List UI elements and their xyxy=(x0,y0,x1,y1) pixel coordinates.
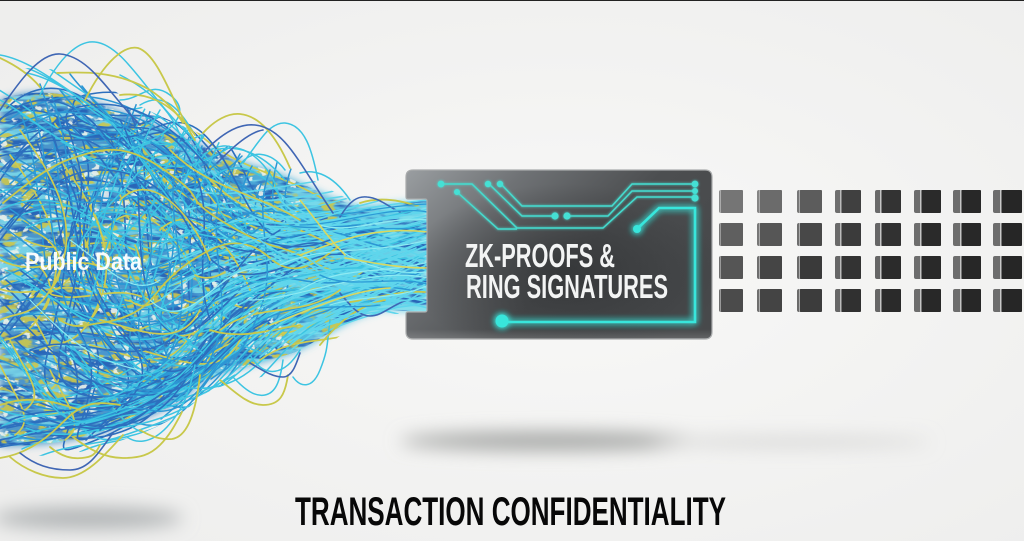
chip upper circuit traces xyxy=(438,181,699,229)
white gaps xyxy=(101,186,253,384)
dark outer arcs xyxy=(0,54,407,470)
block row 2 xyxy=(719,223,1022,246)
pale funnel strands xyxy=(220,200,428,345)
block row 1 xyxy=(719,190,1022,213)
title: TRANSACTION CONFIDENTIALITY xyxy=(295,490,726,534)
yellow strands xyxy=(0,48,425,478)
interior yellow strands xyxy=(0,130,340,410)
cyan strands xyxy=(0,55,420,440)
chip label: RING SIGNATURES xyxy=(466,268,668,305)
outer cyan arcs xyxy=(40,42,350,441)
block row 3 xyxy=(719,256,1022,279)
public data label: Public Data xyxy=(25,248,143,276)
block row 4 xyxy=(719,289,1022,312)
chip lower circuit trace xyxy=(496,208,695,328)
shadow under chip xyxy=(400,432,930,450)
processor chip xyxy=(406,170,712,339)
shadow under tangle xyxy=(0,507,183,529)
tangle base mass xyxy=(0,93,428,446)
data tangle xyxy=(0,41,426,479)
mid blue strands xyxy=(0,90,420,426)
fibre texture xyxy=(0,92,426,446)
dark blue strands xyxy=(0,100,350,440)
yellow funnel strands xyxy=(270,200,428,325)
chip body xyxy=(406,170,712,339)
dense strand copies xyxy=(0,68,426,456)
chip label: ZK-PROOFS & xyxy=(465,237,615,274)
blue funnel strands xyxy=(280,204,428,320)
output block grid xyxy=(719,190,1022,312)
light funnel strands xyxy=(30,219,428,370)
chip label xyxy=(465,237,668,305)
